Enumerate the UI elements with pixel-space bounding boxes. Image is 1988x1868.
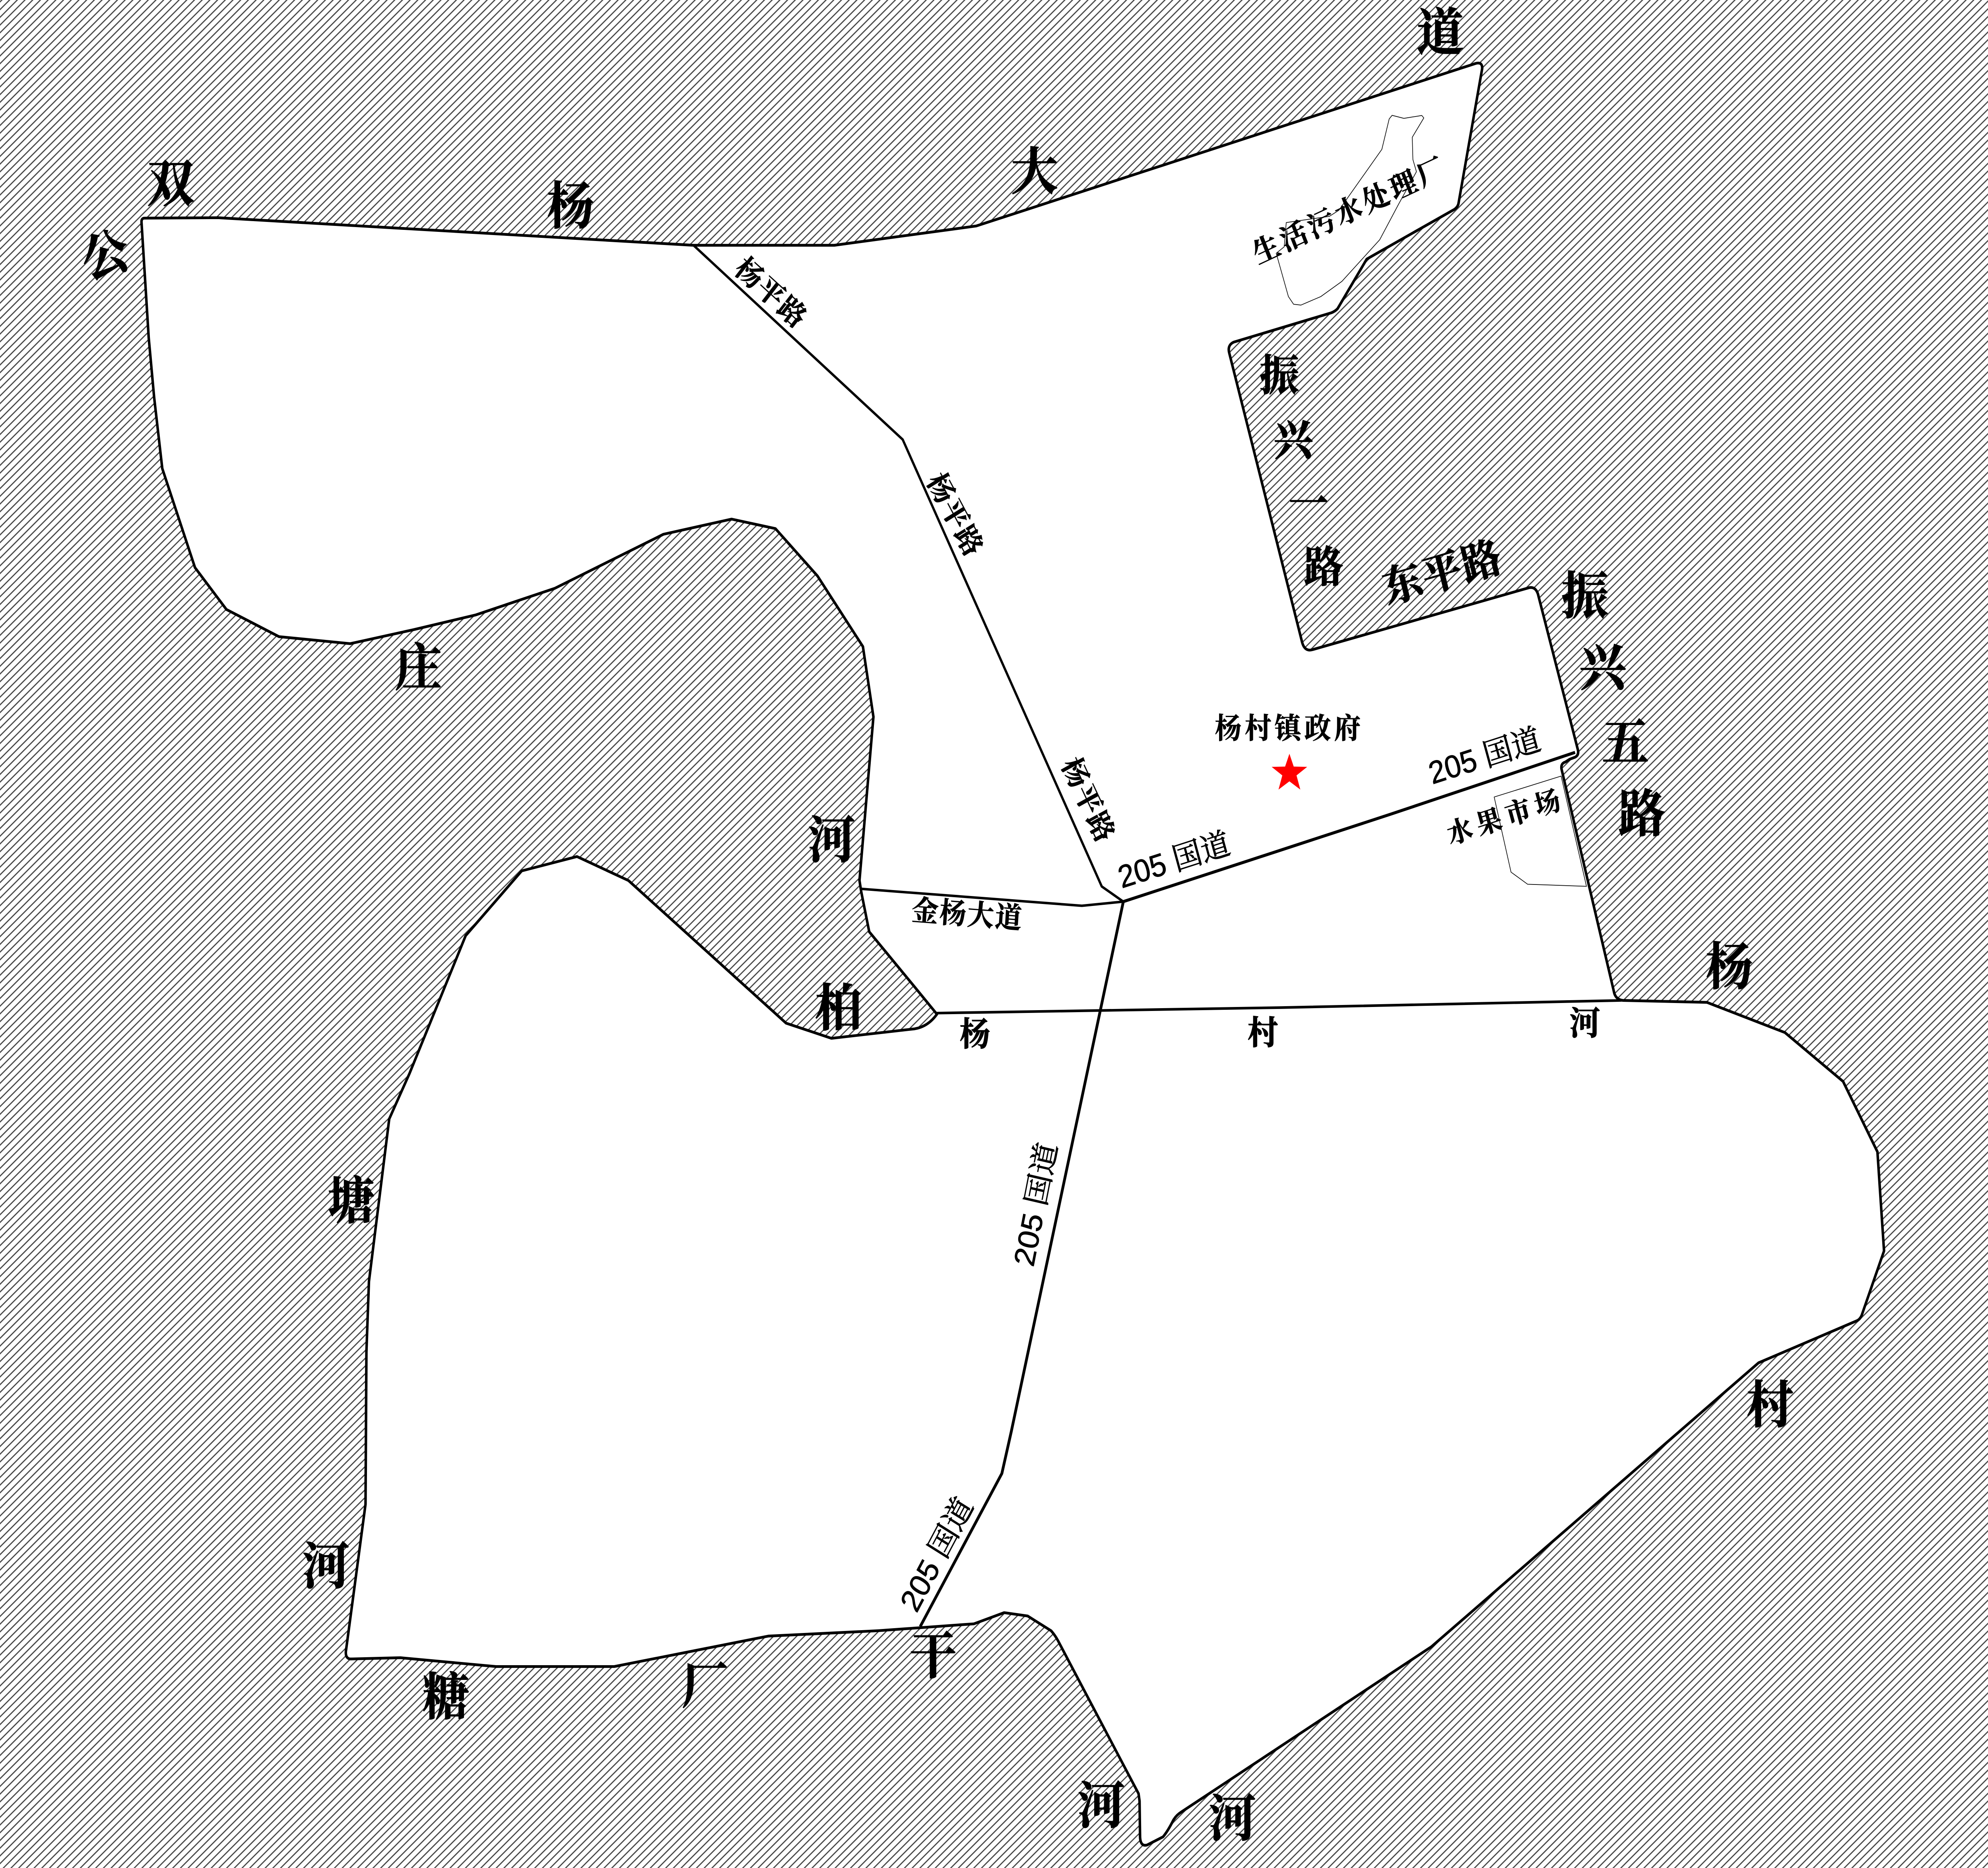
label: 205国道 near junction: 205 国道 bbox=[1114, 826, 1234, 895]
label: 杨平路 south: 杨平路 bbox=[1056, 753, 1120, 848]
road: 金杨大道 bbox=[861, 889, 1123, 906]
area: fruit market bbox=[1494, 776, 1586, 886]
star: town government bbox=[1272, 754, 1307, 789]
label: 金杨大道: 金杨大道 bbox=[911, 895, 1024, 935]
labels: 双杨大道 bbox=[76, 5, 1464, 290]
labels: 振兴五路: 兴 bbox=[1579, 640, 1629, 697]
labels: 糖厂干河: 河 bbox=[1077, 1778, 1124, 1835]
labels: 塘河: 塘 bbox=[328, 1173, 375, 1230]
labels: 塘河 bbox=[303, 1173, 375, 1595]
labels: 振兴一路: 兴 bbox=[1274, 417, 1315, 465]
labels: 双杨大道: 公 bbox=[76, 222, 135, 290]
labels: 振兴五路 bbox=[1561, 568, 1665, 843]
labels: 振兴一路: 一 bbox=[1289, 481, 1328, 528]
labels: 振兴一路 bbox=[1260, 353, 1343, 591]
label: 生活污水处理厂: 生活污水处理厂 bbox=[1249, 152, 1452, 270]
label: 水果市场: 水果市场 bbox=[1444, 784, 1569, 850]
labels: 庄柏河 bbox=[395, 640, 862, 1037]
labels: 振兴五路: 路 bbox=[1618, 786, 1665, 843]
labels: 杨村河 outer bbox=[1209, 939, 1794, 1847]
labels: 双杨大道: 双 bbox=[147, 156, 194, 213]
labels: 双杨大道: 杨 bbox=[547, 178, 594, 235]
road: 杨平路 bbox=[693, 245, 1123, 902]
labels: 糖厂干河: 干 bbox=[910, 1628, 957, 1685]
labels: 双杨大道: 道 bbox=[1417, 5, 1464, 61]
labels: 糖厂干河 bbox=[422, 1628, 1124, 1835]
label: 杨平路 north: 杨平路 bbox=[729, 252, 812, 335]
labels: 杨村河 outer: 村 bbox=[1747, 1377, 1794, 1434]
labels: 糖厂干河: 糖 bbox=[422, 1669, 469, 1726]
labels: 糖厂干河: 厂 bbox=[681, 1658, 728, 1715]
labels: 振兴五路: 五 bbox=[1602, 714, 1649, 771]
labels: 杨村河 outer: 杨 bbox=[1706, 939, 1753, 996]
road: 205国道 south section bbox=[920, 902, 1123, 1627]
road: 205国道 east section bbox=[1123, 752, 1575, 902]
labels: 杨村河: 杨 bbox=[960, 1017, 990, 1053]
labels: 双杨大道: 大 bbox=[1011, 144, 1058, 200]
area: sewage treatment plant bbox=[1276, 115, 1424, 305]
river: 杨村河 bbox=[937, 1001, 1621, 1013]
labels: 塘河: 河 bbox=[303, 1538, 349, 1595]
label: 杨村镇政府: 杨村镇政府 bbox=[1215, 713, 1364, 745]
labels: 杨村河 outer: 河 bbox=[1209, 1790, 1256, 1847]
label: 205国道 east: 205 国道 bbox=[1425, 722, 1544, 791]
labels: 庄柏河: 河 bbox=[808, 812, 855, 869]
labels: 杨村河 bbox=[960, 1006, 1600, 1053]
label: 杨平路 middle: 杨平路 bbox=[921, 468, 988, 563]
label: 205国道 south: 205 国道 bbox=[1008, 1139, 1064, 1269]
labels: 杨村河: 河 bbox=[1570, 1006, 1600, 1042]
labels: 振兴一路: 路 bbox=[1304, 544, 1343, 591]
labels: 振兴一路: 振 bbox=[1260, 353, 1299, 400]
labels: 庄柏河: 庄 bbox=[395, 640, 442, 697]
labels: 杨村河: 村 bbox=[1248, 1015, 1278, 1052]
labels: 振兴五路: 振 bbox=[1561, 568, 1608, 625]
labels: 庄柏河: 柏 bbox=[815, 980, 862, 1037]
label: 东平路: 东平路 bbox=[1378, 533, 1507, 613]
label: 205国道 southwest: 205 国道 bbox=[894, 1491, 980, 1617]
